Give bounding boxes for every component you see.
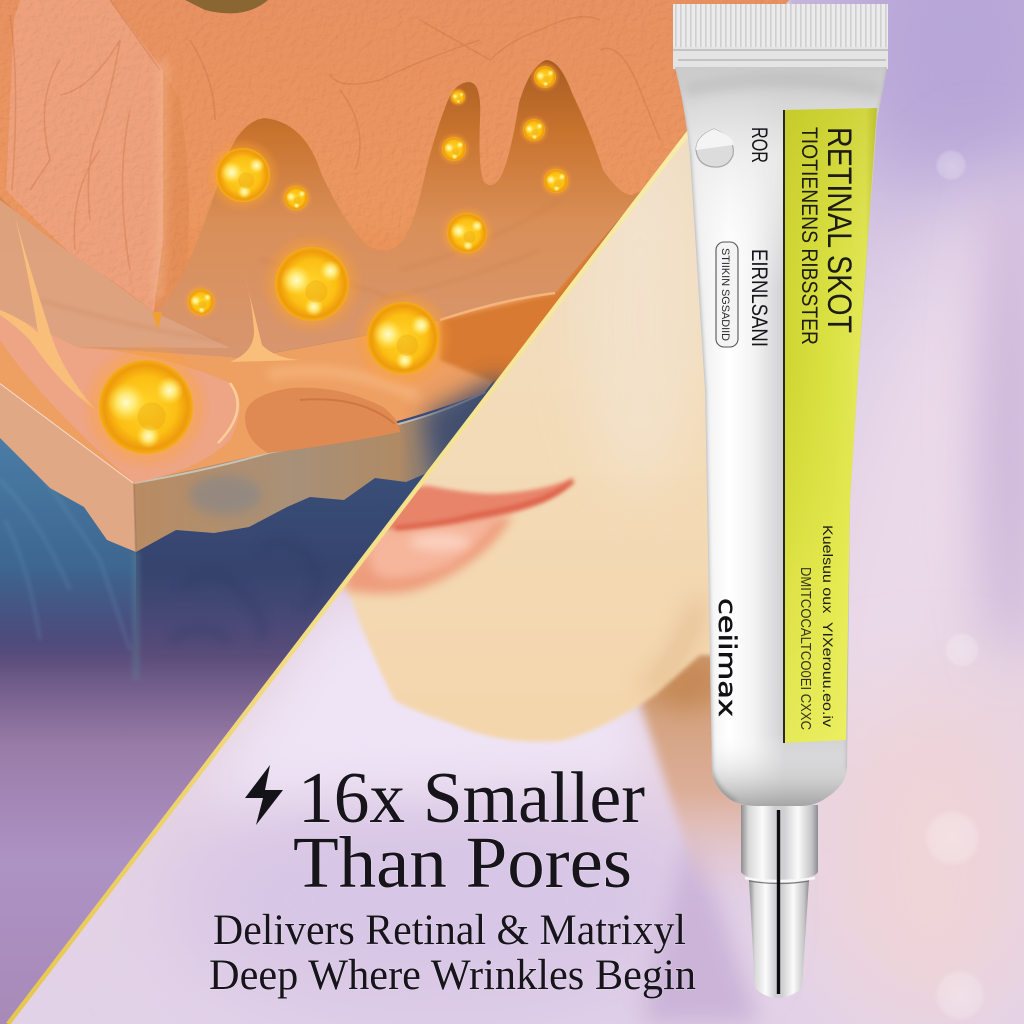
tube [668,4,900,998]
subheading: Deep Where Wrinkles Begin [209,952,696,999]
subheading: Delivers Retinal & Matrixyl [213,907,686,954]
nozzle [741,805,818,998]
panel: face close-up [340,0,791,878]
label heading text: RETINAL SKOT [820,127,858,333]
blue-grey fade at right [425,375,525,485]
capillary cavity [245,388,400,453]
highlight ridge [158,60,163,300]
icon: lightning bolt [245,765,283,825]
headline [293,757,645,903]
crimp seal [673,4,888,69]
label heading text: Kuelsuu oux YIXerouu.eo.iv [820,525,836,727]
neck shadow [636,652,748,878]
blue dermis block [0,438,366,679]
label heading text [797,127,858,730]
skin cell creases [10,0,660,270]
brand name: ceiimax [713,598,741,717]
gold diagonal divider [8,128,692,1024]
label edge line [783,110,785,743]
label heading text: DMITCOCALTCO0EI CXXC [797,567,814,730]
bokeh lights [923,149,986,1021]
top surface below membrane [0,224,614,483]
badge [716,242,738,347]
wedge right face [134,398,469,552]
membrane spikes [0,217,300,410]
tube white-panel text [747,127,772,347]
tube white-panel text: ROR [747,127,772,163]
panel: skin cross-section [0,0,800,1024]
icon: droplet emblem [696,129,733,167]
skin [342,0,791,744]
tube white-panel text: EIRNLSANI [747,249,772,347]
wedge left face [0,383,136,552]
dark rim at top [185,0,268,13]
lips [345,478,574,594]
yellow label [783,108,877,743]
golden retinal spheres [80,62,573,473]
subheading [209,907,696,999]
tube body [668,60,900,810]
dermis layer [0,60,642,358]
headline: Than Pores [293,822,632,903]
headline: 16x Smaller [298,757,645,838]
badge: STIIKIN SGSADIID [719,248,731,341]
epidermis [0,0,800,330]
label heading text: TIOTIENENS RIBSSTER [797,127,822,345]
